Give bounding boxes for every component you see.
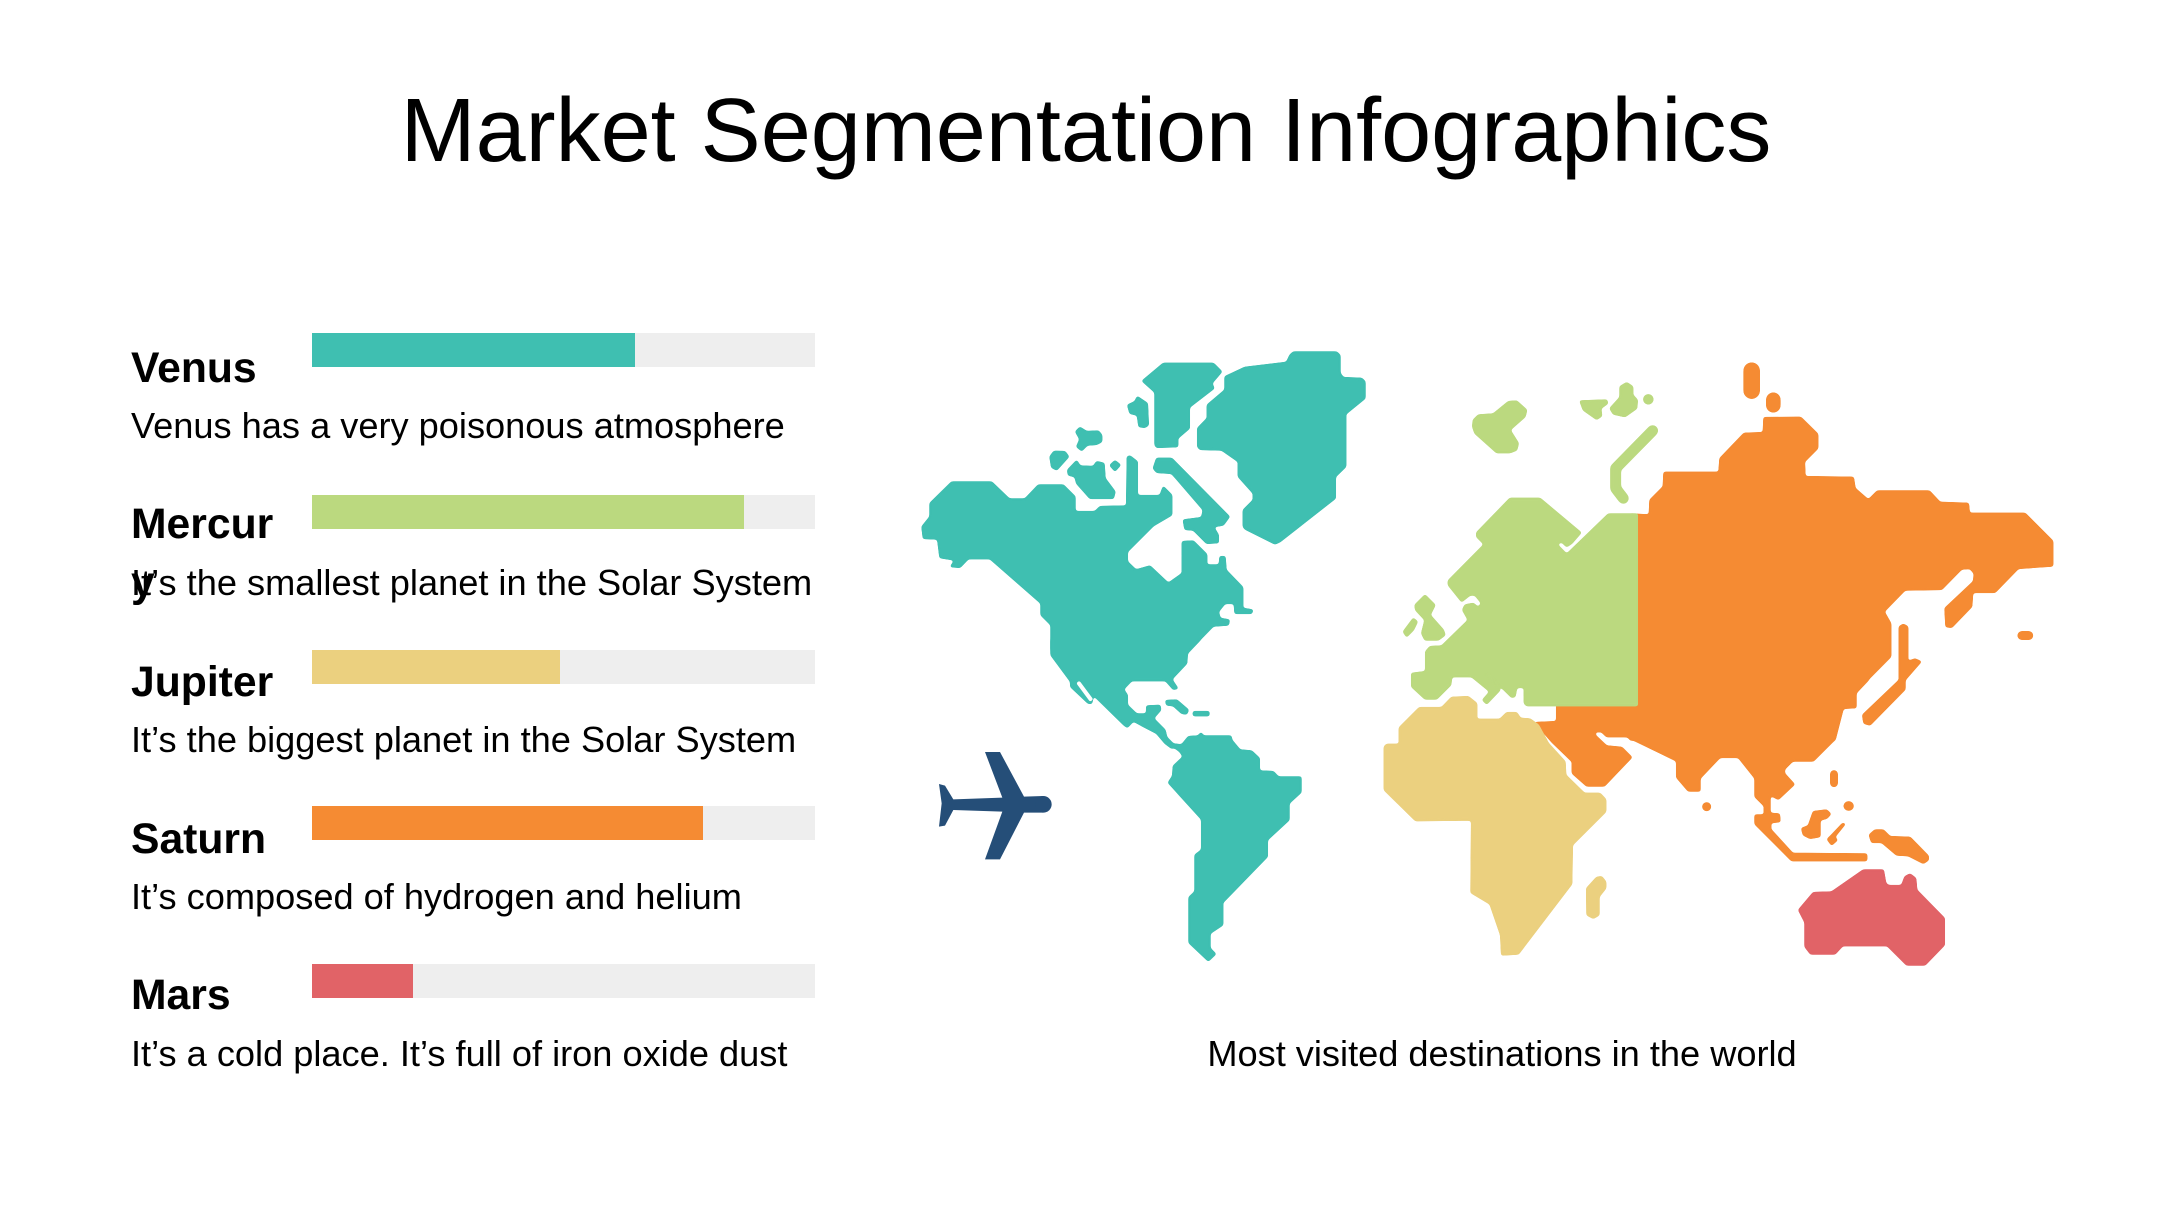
description: Mars: It’s a cold place. It’s full of iron oxide dust (131, 1033, 787, 1074)
bar: Saturn (312, 806, 815, 840)
map region: Africa (1384, 697, 1606, 955)
panel: Mars row (131, 964, 815, 1074)
panel: Venus row (131, 333, 815, 446)
description: Mercury: It’s the smallest planet in the Solar System (131, 562, 812, 603)
heading: Jupiter: Jupiter (131, 658, 273, 706)
bar: Jupiter (312, 650, 815, 684)
description: Jupiter: It’s the biggest planet in the Solar System (131, 719, 796, 760)
title: Market Segmentation Infographics (401, 81, 1771, 181)
panel: Saturn row (131, 806, 815, 917)
bar: Mars (312, 964, 815, 998)
caption: Most visited destinations in the world (1207, 1033, 1797, 1074)
bar: Venus (312, 333, 815, 367)
bar: Mercury (312, 495, 815, 529)
map region: Asia (1535, 362, 2053, 863)
heading: Saturn: Saturn (131, 815, 266, 863)
map region: Europe (1403, 383, 1654, 706)
heading: Mars: Mars (131, 971, 231, 1019)
icon: airplane (939, 752, 1052, 859)
map region: Americas (922, 352, 1365, 961)
heading: Venus: Venus (131, 344, 257, 392)
heading: Mercury: Mercury (131, 500, 273, 606)
description: Saturn: It’s composed of hydrogen and helium (131, 876, 742, 917)
panel: Mercury row (131, 495, 815, 606)
panel: Jupiter row (131, 650, 815, 760)
description: Venus: Venus has a very poisonous atmosphere (131, 405, 785, 446)
map region: Australia (1799, 870, 1944, 965)
